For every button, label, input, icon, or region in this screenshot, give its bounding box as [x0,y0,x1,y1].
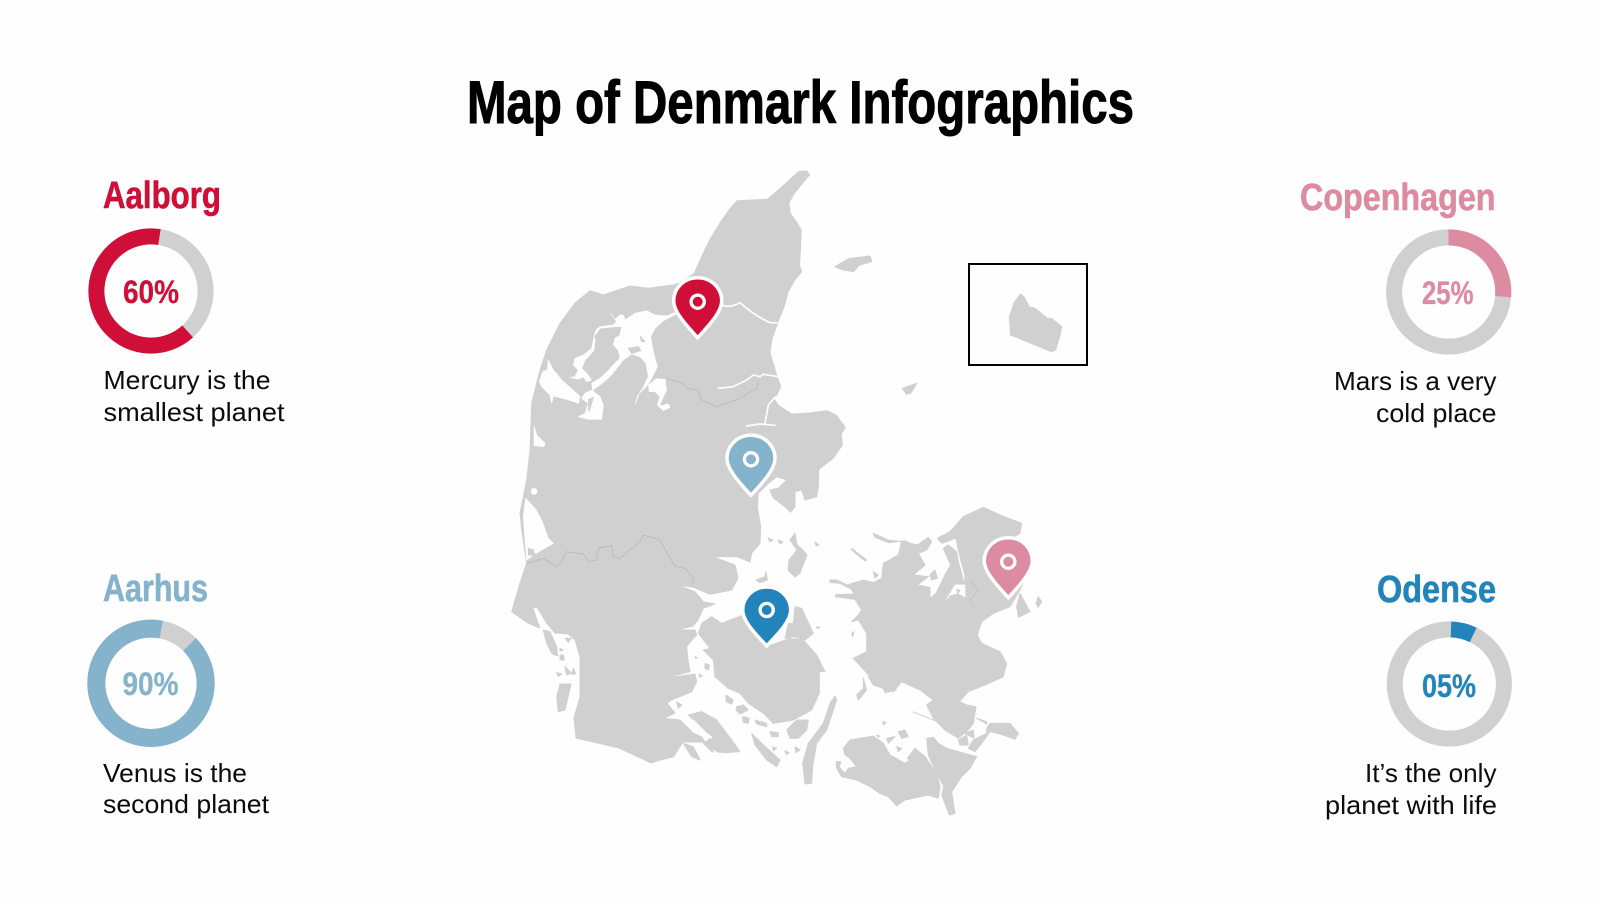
text: life: It’s the only [1365,758,1496,788]
text: Venus: second planet [103,789,270,819]
inset box: Bornholm [969,264,1087,365]
panel: Odense [1325,569,1506,820]
donut: 05%: 05% [1422,668,1476,704]
heading: Aarhus: Aarhus [103,568,208,610]
panel: Copenhagen [1300,177,1503,428]
title: Map of Denmark Infographics [467,69,1134,136]
heading: Aalborg: Aalborg [103,175,221,217]
map: Bornholm [1009,294,1062,352]
text: life: planet with life [1325,790,1497,820]
text: Mars: Mars is a very [1334,366,1496,396]
heading: Odense: Odense [1377,569,1496,611]
donut: 60%: 60% [123,274,179,310]
text: life [1325,758,1497,820]
text: Venus: Venus is the [103,758,247,788]
map: Funen and southern islands [677,572,837,784]
text: Mercury: Mercury is the [104,365,270,395]
text: Mars: cold place [1376,398,1496,428]
map: Samsø and Kattegat islets [768,533,819,577]
donut: 90%: 90% [122,666,178,702]
text: Mercury: smallest planet [104,397,285,427]
pin: Aalborg [674,278,722,338]
pin: Odense [743,587,791,646]
map of Denmark [512,171,1087,815]
heading: Copenhagen: Copenhagen [1300,177,1496,219]
donut: 25% [1394,237,1503,347]
panel: Aalborg [74,175,285,427]
donut: 60% [74,214,228,368]
map: west coast, Ringkøbing fjord and Wadden islands [523,498,693,712]
donut: 90% [74,606,228,761]
map: Jutland mainland [512,171,845,763]
panel: Aarhus [74,568,270,819]
map: Læsø and Anholt [835,256,917,394]
map: Zealand [830,507,1042,738]
map: Lolland, Falster, Møn [836,712,1018,815]
pin: Aarhus [727,435,775,495]
map: Limfjord and north Jutland waters [531,303,778,494]
donut: 25%: 25% [1422,275,1474,311]
text: Venus [103,758,270,819]
pin: Copenhagen [984,538,1032,598]
text: Mars [1334,366,1496,428]
text: Mercury [104,365,285,427]
donut: 05% [1393,628,1506,740]
